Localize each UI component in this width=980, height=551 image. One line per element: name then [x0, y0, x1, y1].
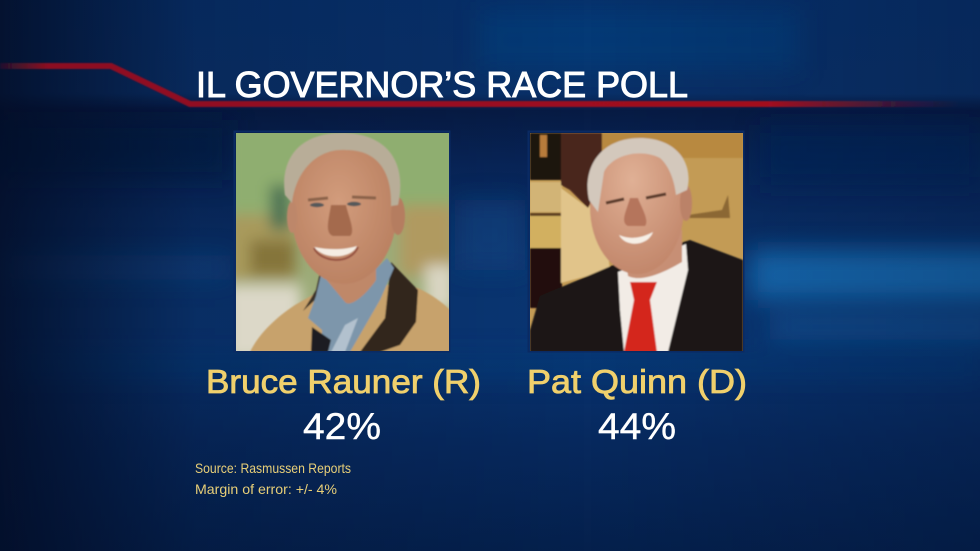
source note: Source: Rasmussen Reports [195, 460, 351, 476]
portrait: Pat Quinn [528, 132, 744, 352]
title: IL GOVERNOR’S RACE POLL [196, 64, 688, 105]
candidate name: Bruce Rauner: Bruce Rauner (R) [206, 363, 481, 400]
poll value: Quinn 44%: 44% [598, 406, 676, 447]
red header line [0, 66, 960, 104]
candidate name: Pat Quinn: Pat Quinn (D) [527, 363, 747, 400]
poll value: Rauner 42%: 42% [303, 406, 381, 447]
portrait: Bruce Rauner [234, 130, 450, 352]
source note: Margin of error: +/- 4% [195, 481, 337, 497]
source note [195, 460, 351, 497]
